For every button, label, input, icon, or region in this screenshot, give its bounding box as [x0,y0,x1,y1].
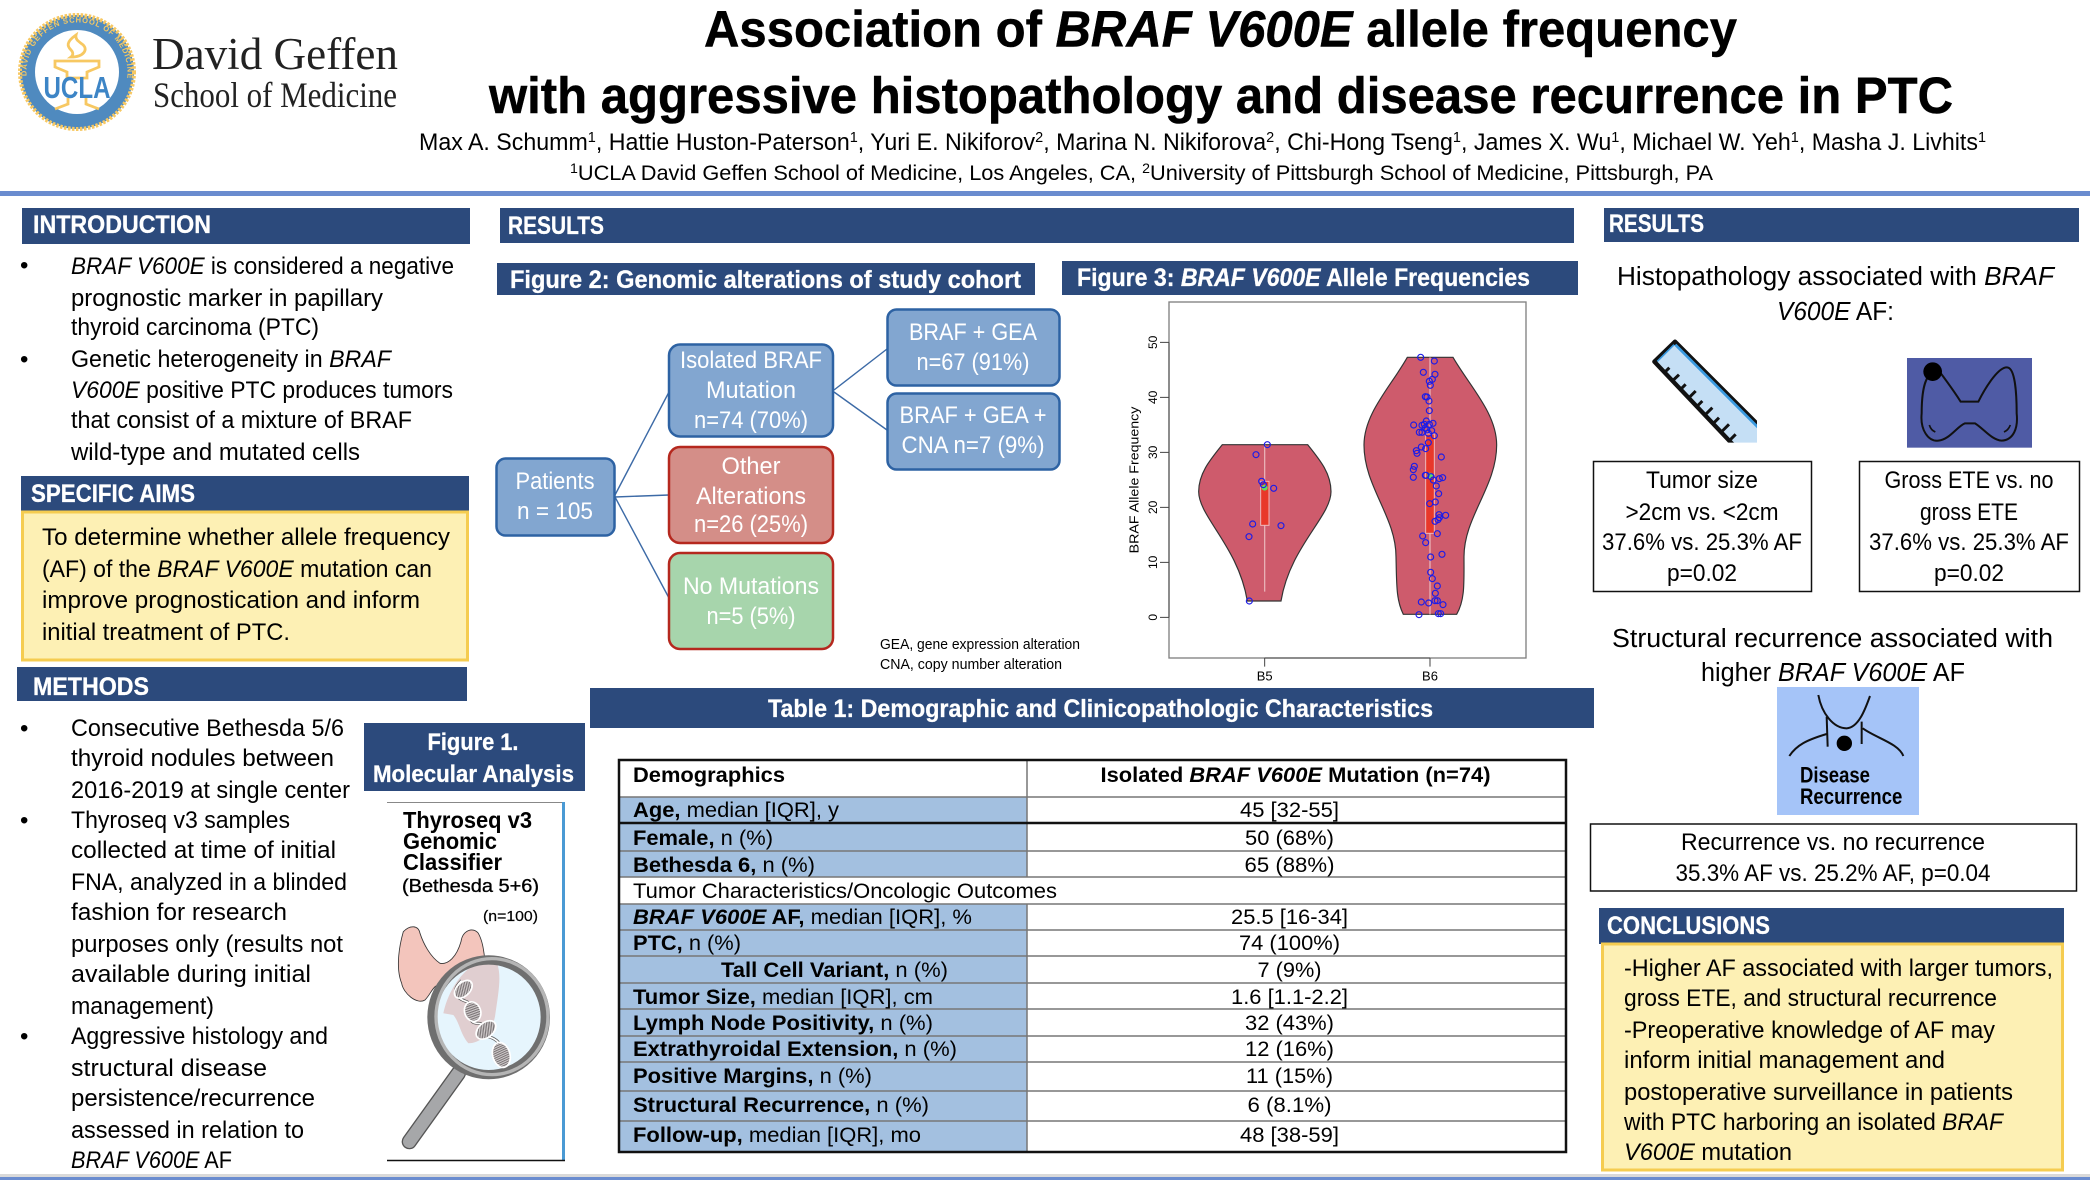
callout: conclusions text [1602,944,2062,1170]
logo wordmark [152,29,398,115]
table: demographics and clinicopathologic characteristics: 45 [32-55] [1240,799,1339,822]
table: demographics and clinicopathologic characteristics: 6 (8.1%) [1248,1094,1332,1117]
box: other alterations: Other [722,453,780,480]
text block: introduction bullets: • [20,252,28,279]
box: patients [496,458,614,536]
callout: conclusions text: -Preoperative knowledge of AF may [1624,1017,1995,1044]
heading: results right [1604,208,2079,242]
stat box: tumor size: p=0.02 [1667,560,1737,587]
heading: figure 1: Figure 1. [428,729,518,756]
box: isolated BRAF mutation: n=74 (70%) [694,407,808,434]
authors: 1 [588,129,596,146]
title [488,0,1953,124]
text block: methods bullets [20,715,350,1174]
table: demographics and clinicopathologic characteristics: 48 [38-59] [1240,1124,1339,1147]
figure frame [387,802,565,1161]
icon: disease recurrence neck [1777,687,1919,815]
table: demographics and clinicopathologic characteristics: Follow-up, median [IQR], mo [633,1124,921,1147]
text block: methods bullets: Consecutive Bethesda 5/6 [71,715,344,742]
authors: 1 [1453,129,1461,146]
authors: 2 [1035,129,1043,146]
text block: methods bullets: purposes only (results not [71,931,343,958]
panel: figure 1 molecular analysis [364,723,585,1161]
table: demographics and clinicopathologic characteristics: Lymph Node Positivity, n (%) [633,1012,933,1035]
table: demographics and clinicopathologic characteristics: PTC, n (%) [633,932,741,955]
panel: conclusions [1599,908,2064,1170]
text block: methods bullets: Thyroseq v3 samples [71,807,290,834]
authors: , Marina N. Nikiforova [1043,129,1267,156]
callout: aims text: improve prognostication and inform [42,587,420,614]
callout: aims text: To determine whether allele frequency [42,524,450,551]
violin chart: B6 [1422,669,1438,684]
text block: methods bullets: • [20,807,28,834]
table: demographics and clinicopathologic characteristics: 25.5 [16-34] [1231,906,1348,929]
text block: methods bullets: BRAF V600E AF [71,1147,232,1174]
text block: methods bullets: structural disease [71,1055,267,1082]
stat box: gross ETE: Gross ETE vs. no [1884,467,2054,494]
table: demographics and clinicopathologic characteristics: Tumor Characteristics/Oncologic Outcomes [633,880,1057,903]
heading: conclusions: CONCLUSIONS [1607,912,1770,940]
text: histopathology heading: Histopathology associated with BRAF [1617,263,2055,291]
callout: conclusions text: V600E mutation [1624,1139,1792,1166]
table: demographics and clinicopathologic characteristics: Positive Margins, n (%) [633,1065,872,1088]
box: BRAF + GEA: BRAF + GEA [909,319,1037,346]
text block: introduction bullets: wild-type and mutated cells [70,439,360,466]
panel: methods [17,667,467,1174]
logo wordmark: David Geffen [152,29,398,79]
figure text: (n=100) [483,909,538,925]
panel: table 1 [590,688,1594,1152]
box: patients: Patients [516,468,594,495]
panel: figure 2 genomic alterations [496,263,1080,673]
violin chart: BRAF Allele Frequency [1126,406,1141,553]
heading: methods [17,667,467,701]
panel: specific aims [21,476,469,660]
text block: introduction bullets: Genetic heterogeneity in BRAF [71,346,392,373]
icon: UCLA seal: DAVID GEFFEN SCHOOL OF MEDICINE [21,17,133,78]
table: demographics and clinicopathologic characteristics: BRAF V600E AF, median [IQR], % [633,906,972,929]
table: demographics and clinicopathologic characteristics: 11 (15%) [1246,1065,1333,1088]
text block: introduction bullets: V600E positive PTC produces tumors [71,377,453,404]
table: demographics and clinicopathologic characteristics: Demographics [633,764,785,787]
box: BRAF + GEA: n=67 (91%) [916,349,1030,376]
text block: methods bullets: persistence/recurrence [71,1085,315,1112]
callout: conclusions text: postoperative surveillance in patients [1624,1079,2013,1106]
box: patients: n = 105 [517,498,593,525]
heading: table 1: Table 1: Demographic and Clinicopathologic Characteristics [768,695,1433,723]
heading: specific aims [21,476,469,512]
flow connectors [615,349,887,598]
panel: center results [500,208,1574,243]
callout: aims text: initial treatment of PTC. [42,619,290,646]
authors: , Masha J. Livhits [1799,129,1978,156]
box: BRAF + GEA + CNA: CNA n=7 (9%) [902,432,1044,459]
authors: 1 [1978,129,1986,146]
table: demographics and clinicopathologic characteristics: Extrathyroidal Extension, n (%) [633,1038,957,1061]
heading: conclusions [1599,908,2064,944]
table: demographics and clinicopathologic characteristics: Structural Recurrence, n (%) [633,1094,929,1117]
violin chart [1126,302,1526,684]
box: isolated BRAF mutation: Mutation [706,377,796,404]
authors: , Chi-Hong Tseng [1274,129,1453,156]
table: demographics and clinicopathologic characteristics: 7 (9%) [1258,959,1322,982]
stat box: recurrence: Recurrence vs. no recurrence [1681,829,1985,856]
icon: disease recurrence neck: Recurrence [1800,784,1902,809]
heading: figure 1: Molecular Analysis [373,761,574,788]
stat box: gross ETE: p=0.02 [1934,560,2004,587]
icon: UCLA seal: UCLA [44,70,110,105]
heading: results right: RESULTS [1609,210,1704,238]
violin chart: 40 [1146,390,1160,404]
figure text: Classifier [403,849,502,875]
callout: conclusions text: inform initial management and [1624,1047,1945,1074]
text block: introduction bullets: BRAF V600E is considered a negative [71,253,454,280]
logo: UCLA David Geffen School of Medicine [18,13,398,131]
violin chart: B5 [1257,669,1273,684]
callout: conclusions text: -Higher AF associated with larger tumors, [1624,955,2053,982]
box: BRAF + GEA + CNA [888,394,1060,470]
legend: abbreviations: GEA, gene expression alteration [880,637,1080,653]
icon: thyroid with nodule [1907,358,2032,448]
legend: abbreviations: CNA, copy number alteration [880,657,1062,673]
callout: conclusions text: gross ETE, and structural recurrence [1624,985,1997,1012]
callout: aims text [22,512,468,660]
box: other alterations: Alterations [696,483,806,510]
authors: , Hattie Huston-Paterson [596,129,850,156]
text: structural recurrence heading: higher BRAF V600E AF [1701,659,1965,687]
violin chart: 10 [1146,555,1160,569]
icon: ruler [1652,340,1757,443]
callout: aims text: (AF) of the BRAF V600E mutation can [42,556,432,583]
table: demographics and clinicopathologic characteristics: Female, n (%) [633,827,773,850]
box: other alterations: n=26 (25%) [694,511,808,538]
figure text [402,807,539,925]
table: demographics and clinicopathologic characteristics: 50 (68%) [1245,827,1334,850]
stat box: recurrence: 35.3% AF vs. 25.2% AF, p=0.04 [1676,860,1990,887]
text block: methods bullets: collected at time of initial [71,837,336,864]
panel: introduction [20,208,470,466]
table: demographics and clinicopathologic characteristics: 1.6 [1.1-2.2] [1231,986,1348,1009]
figure text: Thyroseq v3 [403,807,532,833]
text block: introduction bullets: that consist of a mixture of BRAF [71,407,412,434]
box: BRAF + GEA + CNA: BRAF + GEA + [900,402,1046,429]
callout: conclusions text: with PTC harboring an isolated BRAF [1623,1109,2004,1136]
text: histopathology heading [1617,263,2055,326]
text block: introduction bullets: prognostic marker in papillary [71,285,383,312]
stat box: gross ETE: gross ETE [1920,499,2018,526]
affiliations: 2 [1142,160,1150,176]
box: no mutations [669,553,833,649]
figure text: Genomic [403,828,497,854]
table: demographics and clinicopathologic characteristics: 12 (16%) [1245,1038,1334,1061]
heading: methods: METHODS [33,673,149,701]
violin chart: 0 [1146,614,1160,621]
box: isolated BRAF mutation: Isolated BRAF [680,347,822,374]
authors: 1 [1611,129,1619,146]
table: demographics and clinicopathologic characteristics: Bethesda 6, n (%) [633,854,815,877]
text block: methods bullets: thyroid nodules between [71,745,334,772]
icon: thyroid under magnifying glass with DNA [398,927,548,1142]
text block: methods bullets: • [20,1023,28,1050]
text block: introduction bullets: thyroid carcinoma (PTC) [71,314,319,341]
text block: methods bullets: management) [71,993,214,1020]
stat box: recurrence [1590,824,2076,891]
authors: , James X. Wu [1461,129,1611,156]
logo wordmark: School of Medicine [153,75,397,115]
heading: introduction: INTRODUCTION [33,211,211,239]
affiliations: UCLA David Geffen School of Medicine, Los Angeles, CA, [578,161,1142,185]
heading: figure 3: Figure 3: BRAF V600E Allele Frequencies [1077,264,1530,292]
box: other alterations [669,447,833,543]
stat box: gross ETE [1860,462,2080,592]
text block: methods bullets: assessed in relation to [71,1117,304,1144]
text block: methods bullets: Aggressive histology and [71,1023,328,1050]
authors: 1 [850,129,858,146]
text block: introduction bullets: • [20,346,28,373]
heading: results [500,208,1574,243]
stat box: gross ETE: 37.6% vs. 25.3% AF [1869,529,2069,556]
text block: methods bullets: fashion for research [71,899,287,926]
violin chart: 30 [1146,445,1160,459]
stat box: tumor size [1594,462,1812,592]
heading: introduction [22,208,470,244]
violin chart: 20 [1146,500,1160,514]
text block: methods bullets: available during initial [71,961,311,988]
table: demographics and clinicopathologic characteristics: 32 (43%) [1245,1012,1334,1035]
table: demographics and clinicopathologic characteristics: Tumor Size, median [IQR], cm [633,986,933,1009]
text: structural recurrence heading: Structural recurrence associated with [1612,625,2053,653]
heading: table 1 [590,688,1594,728]
table: demographics and clinicopathologic characteristics: Isolated BRAF V600E Mutation (n=74) [1100,764,1490,787]
text block: methods bullets: 2016-2019 at single center [71,777,350,804]
heading: results: RESULTS [508,212,604,240]
text: histopathology heading: V600E AF: [1777,298,1894,326]
figure text: (Bethesda 5+6) [402,875,539,896]
authors: , Michael W. Yeh [1619,129,1791,156]
stat box: tumor size: >2cm vs. <2cm [1626,499,1778,526]
box: no mutations: n=5 (5%) [706,603,796,630]
table: demographics and clinicopathologic characteristics: Age, median [IQR], y [633,799,840,822]
authors: Max A. Schumm [419,129,594,156]
legend: abbreviations [880,637,1080,673]
text block: methods bullets: FNA, analyzed in a blinded [71,869,347,896]
heading: figure 2: Figure 2: Genomic alterations of study cohort [510,266,1022,294]
box: isolated BRAF mutation [669,344,833,436]
affiliations: University of Pittsburgh School of Medicine, Pittsburgh, PA [1150,161,1714,185]
table: demographics and clinicopathologic characteristics: 74 (100%) [1239,932,1340,955]
title: Association of BRAF V600E allele frequency [704,0,1738,58]
icon: disease recurrence neck: Disease [1800,762,1870,787]
authors: 2 [1266,129,1274,146]
stat box: tumor size: Tumor size [1646,467,1758,494]
title: with aggressive histopathology and disease recurrence in PTC [488,67,1953,124]
panel: right results [1590,208,2080,891]
panel: figure 3 allele frequencies [1062,261,1578,684]
stat box: tumor size: 37.6% vs. 25.3% AF [1602,529,1802,556]
authors: , Yuri E. Nikiforov [858,129,1035,156]
text: structural recurrence heading [1612,625,2053,687]
affiliations: 1 [570,160,578,176]
heading: specific aims: SPECIFIC AIMS [31,480,195,508]
text block: methods bullets: • [20,715,28,742]
box: no mutations: No Mutations [683,573,819,600]
table: demographics and clinicopathologic characteristics: 65 (88%) [1244,854,1334,877]
authors: 1 [1791,129,1799,146]
heading: figure 1 [364,723,585,791]
violin chart: 50 [1146,335,1160,349]
table: demographics and clinicopathologic characteristics [619,760,1566,1152]
icon: UCLA seal [18,13,136,131]
text block: introduction bullets [20,252,454,466]
table: demographics and clinicopathologic characteristics: Tall Cell Variant, n (%) [721,959,948,982]
box: BRAF + GEA [888,310,1060,386]
